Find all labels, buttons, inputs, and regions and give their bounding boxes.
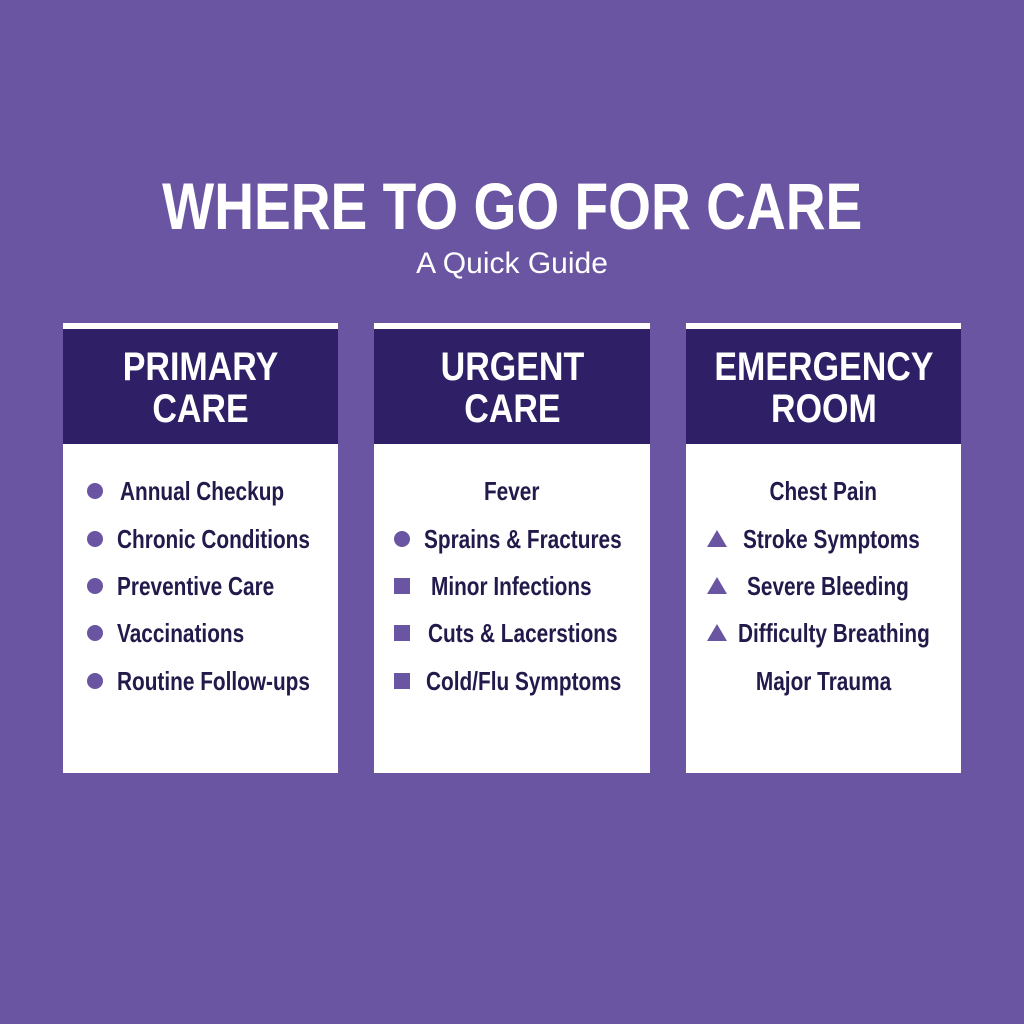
item: annual checkup: Annual Checkup bbox=[120, 476, 284, 506]
heading: primary care: CARE bbox=[152, 387, 249, 431]
item: minor infections: Minor Infections bbox=[431, 571, 592, 601]
item: bleeding: Severe Bleeding bbox=[747, 571, 909, 601]
bullet: breathing bbox=[707, 624, 727, 641]
title: WHERE TO GO FOR CARE bbox=[162, 169, 862, 243]
bullet: vaccinations bbox=[87, 625, 103, 641]
heading: primary care: PRIMARY bbox=[123, 345, 278, 389]
bullet: preventive bbox=[87, 578, 103, 594]
heading: emergency room: ROOM bbox=[771, 387, 876, 431]
item: preventive: Preventive Care bbox=[117, 571, 274, 601]
item: vaccinations: Vaccinations bbox=[117, 618, 244, 648]
item: fever: Fever bbox=[484, 476, 540, 506]
item: follow-ups: Routine Follow-ups bbox=[117, 666, 310, 696]
bullet: chronic bbox=[87, 531, 103, 547]
item: chronic: Chronic Conditions bbox=[117, 524, 310, 554]
item: stroke: Stroke Symptoms bbox=[743, 524, 920, 554]
bullet: sprains bbox=[394, 531, 410, 547]
bullet: annual checkup bbox=[87, 483, 103, 499]
heading: emergency room: EMERGENCY bbox=[714, 345, 933, 389]
bullet: minor infections bbox=[394, 578, 410, 594]
panel: emergency room bbox=[686, 323, 961, 773]
heading: urgent care bbox=[374, 329, 650, 444]
heading: urgent care: URGENT bbox=[440, 345, 584, 389]
bullet: cold/flu bbox=[394, 673, 410, 689]
heading: primary care bbox=[63, 329, 338, 444]
bullet: follow-ups bbox=[87, 673, 103, 689]
panel: urgent care bbox=[374, 323, 650, 773]
bullet: cuts bbox=[394, 625, 410, 641]
heading: urgent care: CARE bbox=[464, 387, 560, 431]
bullet: stroke bbox=[707, 530, 727, 547]
bullet: bleeding bbox=[707, 577, 727, 594]
subtitle: A Quick Guide bbox=[416, 247, 608, 280]
panel: primary care bbox=[63, 323, 338, 773]
item: sprains: Sprains & Fractures bbox=[424, 524, 622, 554]
item: cuts: Cuts & Lacerstions bbox=[428, 618, 618, 648]
item: major trauma: Major Trauma bbox=[756, 666, 891, 696]
item: chest pain: Chest Pain bbox=[770, 476, 877, 506]
item: cold/flu: Cold/Flu Symptoms bbox=[426, 666, 621, 696]
item: breathing: Difficulty Breathing bbox=[738, 618, 930, 648]
heading: emergency room bbox=[686, 329, 961, 444]
